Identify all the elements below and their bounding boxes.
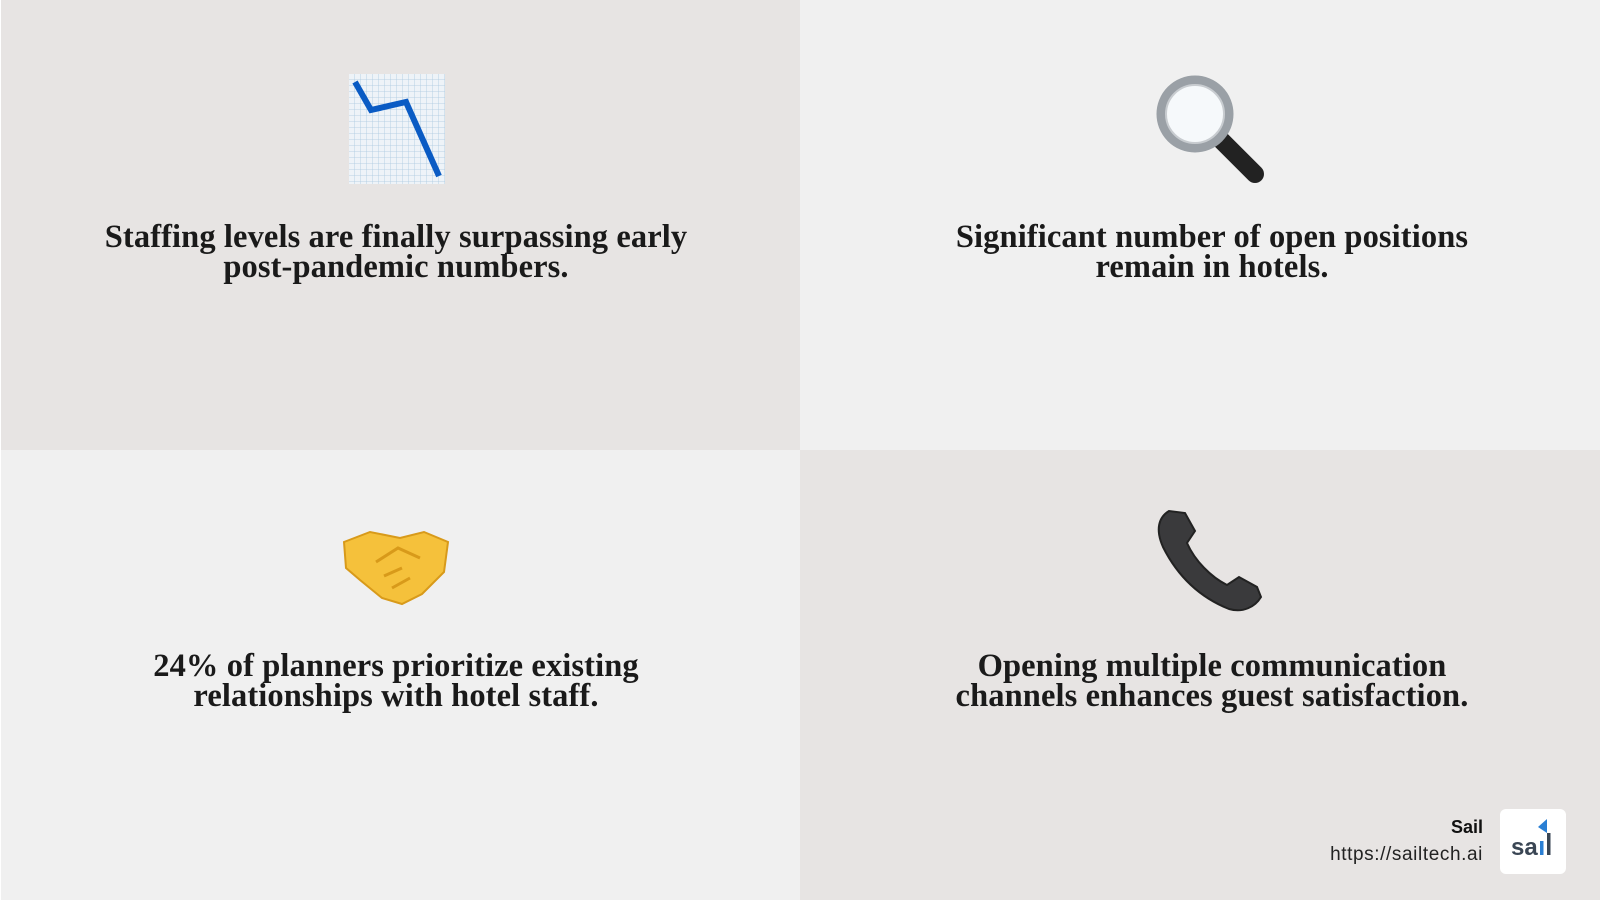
text: relationships xyxy=(153,648,639,714)
text: communication xyxy=(956,648,1468,714)
text: relationships: relationships with hotel staff. xyxy=(193,678,599,714)
text: url: https://sailtech.ai xyxy=(1330,844,1483,865)
icon: handshake xyxy=(342,531,450,606)
text: staffing xyxy=(105,219,687,285)
logo xyxy=(1500,809,1566,874)
icon: magnifier xyxy=(1156,76,1264,183)
icon: telephone receiver xyxy=(1158,510,1262,612)
text: relationships: 24% of planners prioritize existing xyxy=(153,648,639,684)
text: communication: Opening multiple communication xyxy=(978,648,1446,684)
text: staffing: Staffing levels are finally surpassing early xyxy=(105,219,687,255)
logo: sa xyxy=(1511,834,1538,861)
text: communication: channels enhances guest satisfaction. xyxy=(956,678,1468,714)
text: staffing: post-pandemic numbers. xyxy=(223,249,569,285)
text: open positions xyxy=(956,219,1468,285)
text: brand name: Sail xyxy=(1451,817,1483,837)
text: open positions: remain in hotels. xyxy=(1095,249,1329,285)
text: open positions: Significant number of open positions xyxy=(956,219,1468,255)
footer: brand xyxy=(1330,809,1566,874)
panel: staffing xyxy=(1,0,801,450)
panel: communication xyxy=(800,450,1600,900)
panel: relationships xyxy=(1,450,801,900)
panel: open positions xyxy=(800,0,1600,450)
icon: chart decreasing xyxy=(349,74,445,184)
